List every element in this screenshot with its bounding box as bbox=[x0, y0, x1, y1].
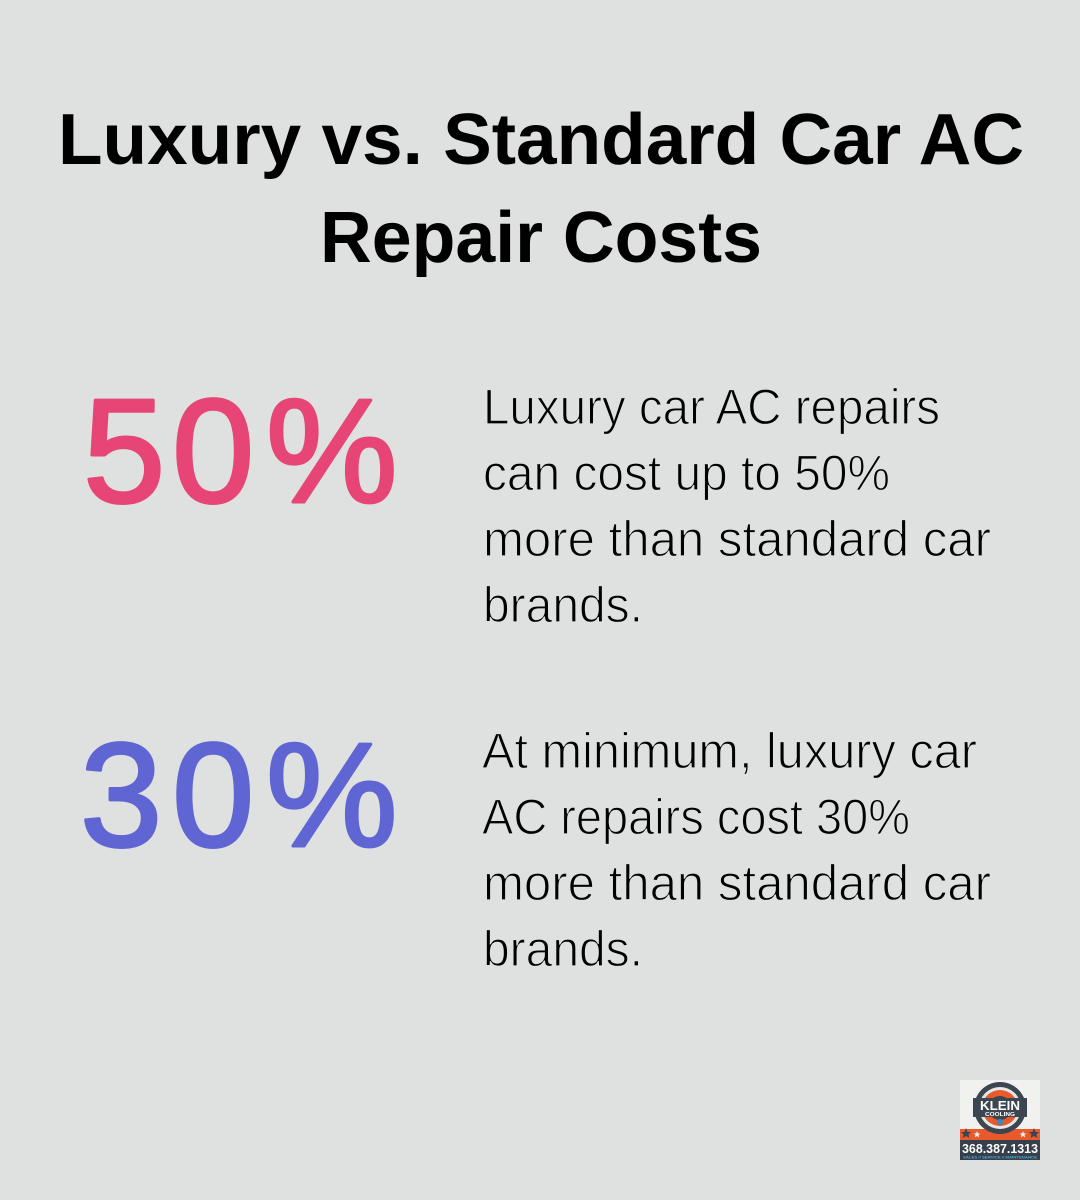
text block: 30% description bbox=[482, 723, 991, 977]
text block: 30% description: more than standard car bbox=[483, 855, 991, 911]
text block: 30% description: At minimum, luxury car bbox=[482, 723, 977, 779]
text block: 30% description: brands. bbox=[483, 921, 643, 977]
logo: Klein Cooling badge: COOLING bbox=[985, 1112, 1015, 1118]
text block: 50% description: Luxury car AC repairs bbox=[483, 379, 940, 435]
title: Repair Costs bbox=[320, 198, 762, 278]
logo: Klein Cooling badge: 368.387.1313 bbox=[962, 1141, 1038, 1156]
logo: Klein Cooling badge: KLEIN bbox=[980, 1098, 1020, 1113]
text block: 50% description: brands. bbox=[483, 577, 643, 633]
logo: Klein Cooling badge bbox=[960, 1080, 1040, 1160]
title: Luxury vs. Standard Car AC bbox=[58, 100, 1024, 180]
stat: 50%: 50% bbox=[83, 369, 398, 534]
text block: 50% description: more than standard car bbox=[483, 511, 991, 567]
text block: 50% description bbox=[483, 379, 991, 633]
title bbox=[58, 100, 1024, 278]
text block: 30% description: AC repairs cost 30% bbox=[482, 789, 910, 845]
stat: 30%: 30% bbox=[80, 713, 398, 878]
logo: Klein Cooling badge: SALES // SERVICE // MAINTENANCE bbox=[963, 1154, 1037, 1160]
text block: 50% description: can cost up to 50% bbox=[483, 445, 890, 501]
